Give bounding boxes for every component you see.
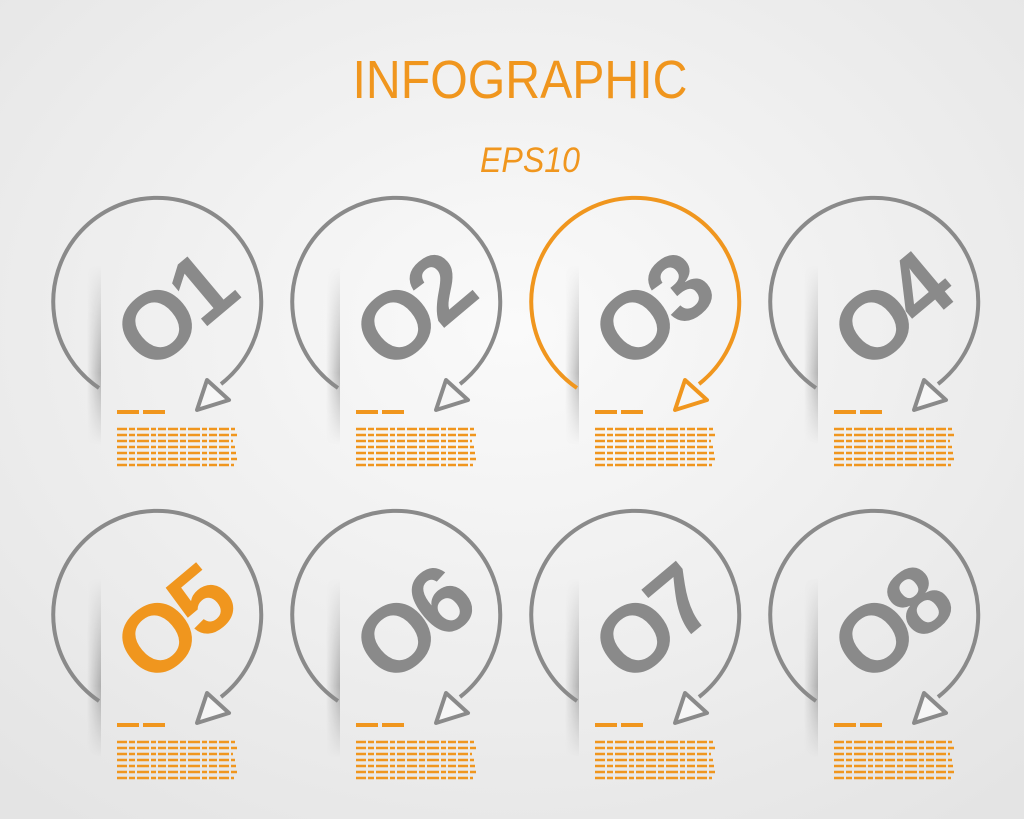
step 04 [770,198,978,465]
subtitle: EPS10 [480,141,580,180]
step 03 [531,198,739,465]
step 03: O3 [573,232,732,390]
step 02: O2 [334,232,493,390]
step 08: O8 [812,544,972,703]
step 04: O4 [812,230,974,390]
step 06 [292,511,500,778]
step 02 [292,198,500,465]
step 07 [531,511,739,778]
step 01: O1 [95,231,255,390]
step 05: O5 [95,544,255,703]
step 08 [770,511,978,778]
step 05 [53,511,261,778]
title: INFOGRAPHIC [352,50,688,110]
step 06: O6 [334,545,493,703]
step 07: O7 [573,545,732,703]
step 01 [53,198,261,465]
